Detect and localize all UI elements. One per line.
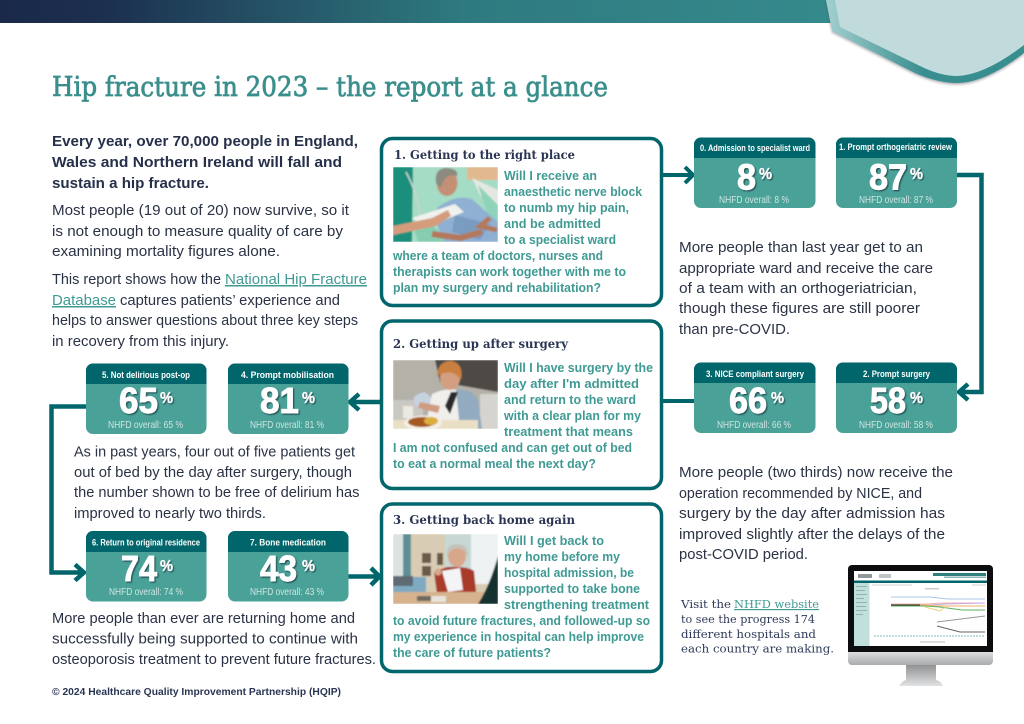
corner tab shape — [826, 0, 1024, 83]
commentary: NICE surgery: surgery by the day after admission has — [679, 505, 945, 522]
survival paragraph: is not enough to measure quality of care by — [52, 223, 344, 240]
patient question: treatment that means — [504, 425, 633, 439]
intro bold statement: Wales and Northern Ireland will fall and — [52, 154, 342, 171]
website callout: NHFD website — [734, 597, 819, 611]
patient question: to avoid future fractures, and followed-up so — [393, 614, 650, 628]
patient question: where a team of doctors, nurses and — [392, 249, 603, 263]
patient question: to a specialist ward — [504, 233, 616, 247]
metric: 3 NICE compliant surgery: % — [771, 390, 784, 407]
commentary: NICE surgery: improved slightly after the delays of the — [679, 526, 945, 543]
metric: 7 bone medication: % — [302, 558, 315, 575]
patient question — [393, 534, 650, 660]
commentary: mobilisation and delirium — [74, 444, 360, 522]
patient question: to eat a normal meal the next day? — [393, 457, 596, 471]
survival paragraph: Most people (19 out of 20) now survive, so it — [52, 202, 350, 219]
website callout: to see the progress 174 — [681, 612, 815, 626]
patient question: to numb my hip pain, — [504, 201, 629, 215]
metric: 4 prompt mobilisation: NHFD overall: 81 % — [250, 420, 324, 431]
patient question: my experience in hospital can help improve — [393, 630, 644, 644]
metric: 7 bone medication — [228, 531, 348, 602]
metric: 4 prompt mobilisation: 81 — [260, 380, 299, 421]
metric: 1 prompt orthogeriatric review: 87 — [869, 156, 907, 198]
arrow: box 3 to card 2 — [663, 399, 694, 403]
website callout: different hospitals and — [681, 627, 817, 641]
intro bold statement — [52, 133, 358, 192]
metric: 4 prompt mobilisation: 4. Prompt mobilisation — [241, 370, 334, 380]
report paragraph: This report shows how the — [52, 271, 221, 288]
intro text block — [52, 133, 367, 350]
metric: 3 NICE compliant surgery: 66 — [729, 380, 767, 421]
metric: 0 admission to specialist ward: 0. Admission to specialist ward — [700, 143, 810, 153]
metric: 2 prompt surgery — [836, 362, 957, 433]
panel: card 3 getting back home again — [382, 504, 662, 672]
patient question: the care of future patients? — [393, 646, 551, 660]
report paragraph: Database — [52, 292, 116, 309]
commentary: NICE surgery: operation recommended by NICE, and — [679, 485, 922, 502]
commentary: NICE surgery: More people (two thirds) now receive the — [679, 464, 953, 481]
metric: 1 prompt orthogeriatric review: 1. Prompt orthogeriatric review — [839, 142, 953, 152]
report paragraph: helps to answer questions about three key steps — [52, 312, 358, 329]
metric: 5 not delirious post-op: NHFD overall: 65 % — [108, 420, 183, 431]
patient question: therapists can work together with me to — [393, 265, 626, 279]
commentary: NICE surgery: post-COVID period. — [679, 546, 808, 563]
heading: 3. Getting back home again — [393, 512, 575, 527]
arrow: box 7 to card 3 — [348, 568, 380, 585]
metric: 4 prompt mobilisation: % — [302, 390, 315, 407]
commentary: returning home — [52, 610, 376, 668]
patient question: Will I receive an — [504, 169, 597, 183]
commentary: appropriate ward — [679, 239, 933, 338]
commentary: mobilisation and delirium: out of bed by the day after surgery, though — [74, 464, 352, 481]
commentary: appropriate ward: than pre-COVID. — [679, 321, 790, 338]
commentary: mobilisation and delirium: As in past years, four out of five patients get — [74, 444, 356, 460]
metric: 1 prompt orthogeriatric review: % — [910, 166, 923, 183]
patient question: with a clear plan for my — [503, 409, 641, 423]
patient question: plan my surgery and rehabilitation? — [393, 281, 601, 295]
commentary: appropriate ward: though these figures are still poorer — [679, 300, 920, 317]
report paragraph — [52, 271, 367, 350]
footer copyright: © 2024 Healthcare Quality Improvement Partnership (HQIP) — [52, 686, 341, 698]
patient question — [392, 169, 642, 295]
metric: 7 bone medication: 7. Bone medication — [250, 538, 326, 548]
metric: 0 admission to specialist ward: % — [759, 166, 772, 183]
photo: patient in hospital bed — [393, 167, 498, 242]
patient question: and be admitted — [504, 217, 601, 231]
commentary: mobilisation and delirium: the number shown to be free of delirium has — [74, 484, 360, 501]
website callout — [680, 597, 834, 656]
metric: 2 prompt surgery: 58 — [870, 380, 906, 421]
website callout: Visit the — [680, 597, 731, 611]
metric: 0 admission to specialist ward — [694, 138, 816, 208]
heading: 1. Getting to the right place — [394, 147, 575, 162]
report paragraph: captures patients’ experience and — [120, 292, 340, 309]
metric: 6 return to original residence — [86, 531, 206, 602]
patient question: supported to take bone — [504, 582, 640, 596]
metric: 3 NICE compliant surgery: 3. NICE compliant surgery — [706, 369, 804, 379]
metric: 1 prompt orthogeriatric review: NHFD overall: 87 % — [859, 195, 933, 206]
icon: desktop monitor showing NHFD website — [848, 565, 993, 686]
title: Hip fracture in 2023 – the report at a glance — [52, 72, 608, 103]
metric: 5 not delirious post-op: 65 — [119, 380, 158, 421]
arrow: card 2 to box 4 — [350, 394, 381, 410]
commentary: appropriate ward: of a team with an orthogeriatrician, — [679, 280, 917, 297]
heading: 2. Getting up after surgery — [393, 336, 569, 351]
patient question: strengthening treatment — [504, 598, 650, 612]
arrow: card 1 to box 0 — [663, 167, 693, 183]
metric: 5 not delirious post-op — [86, 364, 206, 434]
metric: 2 prompt surgery: NHFD overall: 58 % — [859, 420, 933, 431]
patient question: my home before my — [504, 550, 620, 564]
commentary: mobilisation and delirium: improved to nearly two thirds. — [74, 505, 266, 522]
commentary: returning home: More people than ever are returning home and — [52, 610, 355, 627]
metric: 0 admission to specialist ward: NHFD overall: 8 % — [719, 195, 789, 206]
metric: 2 prompt surgery: % — [910, 390, 923, 407]
intro bold statement: Every year, over 70,000 people in England, — [52, 133, 358, 150]
intro bold statement: sustain a hip fracture. — [52, 175, 209, 192]
commentary: appropriate ward: More people than last year get to an — [679, 239, 923, 256]
report paragraph: National Hip Fracture — [225, 271, 367, 288]
photo: woman reading a letter at home — [393, 534, 498, 604]
photo: woman eating a meal — [393, 360, 498, 430]
patient question: Will I get back to — [504, 534, 604, 548]
metric: 6 return to original residence: 74 — [121, 548, 157, 589]
patient question: anaesthetic nerve block — [504, 185, 642, 199]
commentary: returning home: osteoporosis treatment to prevent future fractures. — [52, 651, 376, 668]
patient question: day after I'm admitted — [504, 377, 639, 391]
commentary: NICE surgery — [679, 464, 953, 563]
patient question: hospital admission, be — [504, 566, 634, 580]
metric: 3 NICE compliant surgery — [694, 362, 816, 433]
survival paragraph — [52, 202, 350, 260]
metric: 7 bone medication: 43 — [260, 548, 297, 589]
metric: 3 NICE compliant surgery: NHFD overall: 66 % — [717, 420, 791, 431]
panel: card 1 getting to the right place — [382, 138, 662, 306]
metric: 6 return to original residence: NHFD overall: 74 % — [109, 587, 183, 598]
commentary: appropriate ward: appropriate ward and receive the care — [679, 260, 933, 277]
metric: 5 not delirious post-op: % — [160, 390, 173, 407]
report paragraph: in recovery from this injury. — [52, 333, 229, 350]
patient question: and return to the ward — [504, 393, 636, 407]
metric: 2 prompt surgery: 2. Prompt surgery — [863, 369, 930, 379]
metric: 6 return to original residence: 6. Return to original residence — [92, 538, 200, 548]
metric: 1 prompt orthogeriatric review — [836, 138, 957, 208]
patient question: I am not confused and can get out of bed — [393, 441, 632, 455]
header band — [0, 0, 840, 23]
metric: 7 bone medication: NHFD overall: 43 % — [250, 587, 324, 598]
patient question — [393, 361, 653, 471]
metric: 0 admission to specialist ward: 8 — [737, 156, 756, 198]
metric: 6 return to original residence: % — [160, 558, 173, 575]
arrow: box 5 to box 6 — [52, 406, 86, 580]
arrow: box 1 to box 2 — [957, 175, 982, 400]
panel: card 2 getting up after surgery — [382, 321, 662, 488]
metric: 5 not delirious post-op: 5. Not delirious post-op — [102, 370, 190, 380]
patient question: Will I have surgery by the — [504, 361, 653, 375]
metric: 4 prompt mobilisation — [228, 364, 348, 434]
website callout: each country are making. — [681, 642, 834, 656]
commentary: returning home: successfully being supported to continue with — [52, 630, 358, 648]
survival paragraph: examining mortality figures alone. — [52, 243, 280, 260]
